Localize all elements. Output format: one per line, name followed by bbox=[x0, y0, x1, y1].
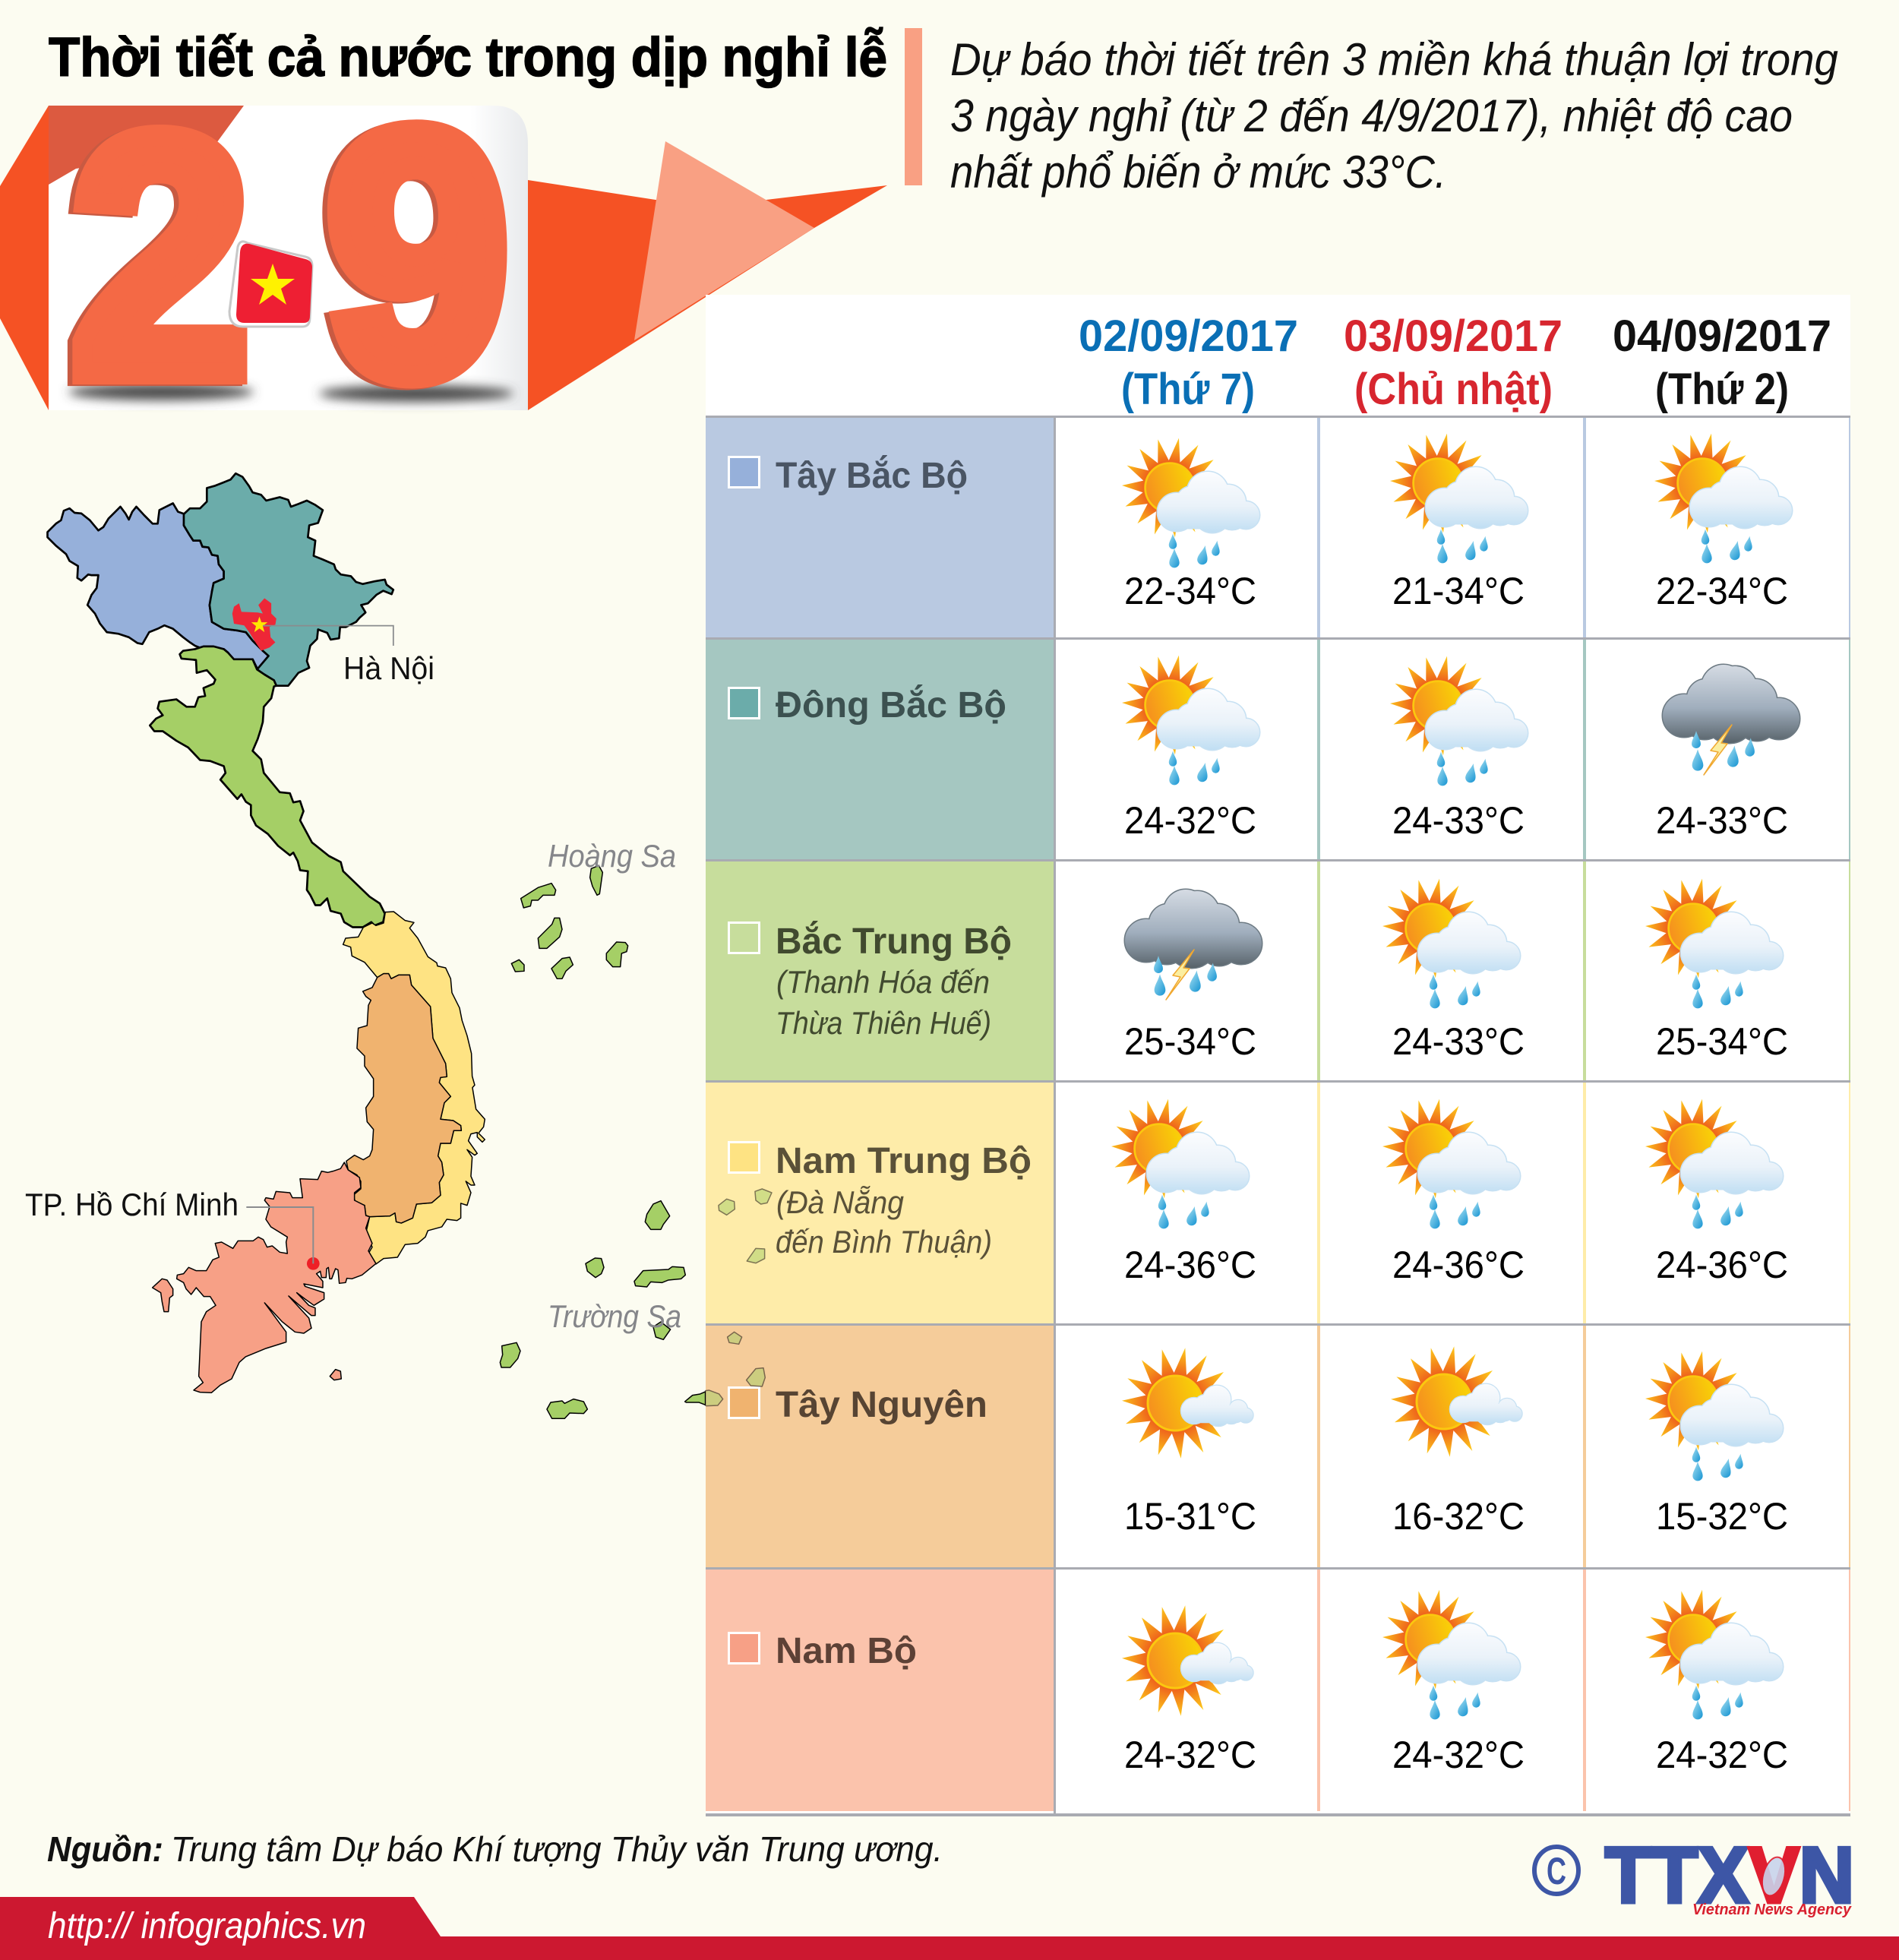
Hà Nội leader line bbox=[263, 626, 393, 646]
region label panel bbox=[706, 1568, 1054, 1811]
temperature: 24-36°C bbox=[1392, 1244, 1525, 1286]
HCMC marker bbox=[307, 1257, 320, 1270]
region label panel bbox=[706, 416, 1054, 638]
south regions bbox=[343, 912, 485, 1264]
weather icon bbox=[1390, 656, 1528, 786]
intro text bbox=[950, 34, 1838, 198]
temperature: 24-36°C bbox=[1656, 1244, 1788, 1286]
date: 03/09/2017: 03/09/2017 bbox=[1344, 311, 1562, 361]
HCMC leader line bbox=[246, 1207, 313, 1263]
legend swatch bbox=[729, 688, 760, 719]
column dividers bbox=[1317, 416, 1850, 638]
row: Đông Bắc Bộ bbox=[706, 638, 1850, 860]
temperature: 24-33°C bbox=[1656, 799, 1788, 842]
copyright mark: C bbox=[1547, 1850, 1566, 1892]
islands: Trường Sa bbox=[500, 1201, 706, 1418]
date: 04/09/2017 bbox=[1613, 311, 1831, 414]
logo: TTXVN bbox=[1534, 1832, 1854, 1920]
temperature: 24-36°C bbox=[1124, 1244, 1256, 1286]
temperature: 22-34°C bbox=[1656, 570, 1788, 612]
weather icon bbox=[1382, 1099, 1520, 1228]
weather icon bbox=[1645, 1099, 1783, 1228]
forecast table bbox=[706, 295, 1850, 1816]
row: Nam Trung Bộ bbox=[706, 1081, 1850, 1324]
temperature: 25-34°C bbox=[1656, 1020, 1788, 1063]
region: Tây Bắc Bộ bbox=[47, 503, 269, 669]
footer band bbox=[0, 1897, 1899, 1960]
weather icon: sun and cloud bbox=[1122, 1605, 1253, 1716]
region name: Nam Bộ bbox=[776, 1631, 917, 1671]
islands: Hoàng Sa bbox=[511, 865, 628, 978]
region: Nam Trung Bộ bbox=[343, 912, 485, 1264]
region: Bắc Trung Bộ bbox=[150, 646, 385, 927]
region: Đông Bắc Bộ bbox=[184, 473, 393, 686]
corner wedge bbox=[49, 106, 244, 185]
region note: (Đà Nẵng bbox=[776, 1184, 904, 1220]
map of Vietnam bbox=[25, 473, 706, 1418]
weather icon: storm bbox=[1663, 665, 1799, 775]
title: Thời tiết cả nước trong dịp nghỉ lễ bbox=[49, 27, 887, 88]
weather icon bbox=[1645, 1351, 1783, 1481]
island: Côn Đảo bbox=[330, 1370, 341, 1380]
weather icon bbox=[1111, 1099, 1249, 1228]
temperature: 16-32°C bbox=[1392, 1495, 1525, 1538]
column dividers bbox=[1317, 638, 1850, 860]
date: 04/09/2017: 04/09/2017 bbox=[1613, 311, 1831, 361]
date: 04/09/2017: (Thứ 2) bbox=[1655, 365, 1789, 414]
Hà Nội star bbox=[251, 617, 267, 632]
weather icon bbox=[1122, 656, 1259, 785]
weather icon bbox=[1390, 434, 1528, 563]
temperature: 24-33°C bbox=[1392, 799, 1525, 842]
region name: Tây Bắc Bộ bbox=[776, 454, 968, 496]
temperature: 24-32°C bbox=[1656, 1734, 1788, 1776]
region name: Tây Nguyên bbox=[776, 1385, 987, 1425]
north regions bbox=[47, 473, 393, 927]
region name: Bắc Trung Bộ bbox=[776, 920, 1012, 962]
intro text: 3 ngày nghỉ (từ 2 đến 4/9/2017), nhiệt độ cao bbox=[950, 90, 1793, 141]
region label panel bbox=[706, 860, 1054, 1081]
accent bar bbox=[905, 28, 922, 185]
region label panel bbox=[706, 638, 1054, 860]
ribbon: orange arrow shapes bbox=[0, 106, 887, 410]
temperature: 15-31°C bbox=[1124, 1495, 1256, 1538]
legend swatch bbox=[729, 1633, 760, 1664]
banner: 2-9 holiday graphic bbox=[0, 60, 887, 448]
legend swatch bbox=[729, 1143, 760, 1173]
temperature: 24-32°C bbox=[1392, 1734, 1525, 1776]
date: 02/09/2017 bbox=[1079, 311, 1298, 414]
region note bbox=[776, 1184, 992, 1260]
label: TP. Hồ Chí Minh: TP. Hồ Chí Minh bbox=[25, 1187, 239, 1222]
table header bbox=[1079, 311, 1831, 414]
date: 02/09/2017: (Thứ 7) bbox=[1121, 365, 1255, 414]
legend swatch bbox=[729, 922, 760, 953]
source note: Nguồn: bbox=[47, 1829, 163, 1869]
weather icon bbox=[1122, 438, 1259, 567]
copyright mark bbox=[1534, 1847, 1578, 1894]
weather icon bbox=[1645, 1590, 1783, 1719]
website url: http:// infographics.vn bbox=[48, 1906, 366, 1946]
region: Tây Nguyên bbox=[346, 974, 461, 1223]
legend swatch bbox=[729, 1387, 760, 1418]
legend swatch bbox=[729, 457, 760, 488]
temperature: 24-32°C bbox=[1124, 799, 1256, 842]
ribbon: salmon triangle bbox=[634, 141, 814, 340]
region note bbox=[776, 964, 991, 1041]
region note: Thừa Thiên Huế) bbox=[776, 1005, 991, 1041]
weather icon bbox=[1382, 1590, 1520, 1719]
column dividers bbox=[1317, 1081, 1850, 1324]
date: 02/09/2017: 02/09/2017 bbox=[1079, 311, 1298, 361]
column dividers bbox=[1317, 1568, 1850, 1811]
region note: (Thanh Hóa đến bbox=[776, 964, 990, 1000]
temperature: 25-34°C bbox=[1124, 1020, 1256, 1063]
weather icon: sun and cloud bbox=[1122, 1348, 1253, 1459]
island: Phú Quốc bbox=[153, 1279, 173, 1312]
region: Nam Bộ bbox=[177, 1162, 376, 1393]
weather icon bbox=[1382, 879, 1520, 1008]
column dividers bbox=[1317, 860, 1850, 1081]
tagline: Vietnam News Agency bbox=[1692, 1902, 1852, 1918]
weather icon bbox=[1654, 434, 1792, 563]
weather icon: storm bbox=[1125, 890, 1262, 1000]
column dividers bbox=[1317, 1324, 1850, 1568]
intro text: Dự báo thời tiết trên 3 miền khá thuận lợi trong bbox=[950, 34, 1838, 85]
label: Hà Nội: Hà Nội bbox=[343, 650, 434, 686]
digit 2: 2 bbox=[71, 65, 250, 447]
image panel bbox=[49, 106, 528, 410]
flag bbox=[229, 242, 312, 327]
temperature: 21-34°C bbox=[1392, 570, 1525, 612]
date: 03/09/2017 bbox=[1344, 311, 1562, 414]
region name: Đông Bắc Bộ bbox=[776, 684, 1006, 726]
Hà Nội area bbox=[232, 598, 276, 651]
row: Bắc Trung Bộ bbox=[706, 860, 1850, 1081]
label: Hoàng Sa: Hoàng Sa bbox=[548, 838, 676, 874]
intro text: nhất phổ biến ở mức 33°C. bbox=[950, 147, 1446, 198]
row: Tây Nguyên bbox=[706, 1324, 1850, 1568]
temperature: 15-32°C bbox=[1656, 1495, 1788, 1538]
label: Trường Sa: Trường Sa bbox=[548, 1298, 681, 1334]
region name: Nam Trung Bộ bbox=[776, 1141, 1032, 1181]
temperature: 24-33°C bbox=[1392, 1020, 1525, 1063]
digit 9: 9 bbox=[327, 60, 508, 448]
digit shadows bbox=[68, 384, 513, 402]
islands overlapping table bbox=[706, 1189, 772, 1406]
table background bbox=[706, 295, 1850, 1815]
temperature: 24-32°C bbox=[1124, 1734, 1256, 1776]
region note: đến Bình Thuận) bbox=[776, 1224, 992, 1260]
source note: Trung tâm Dự báo Khí tượng Thủy văn Trung ương. bbox=[171, 1829, 943, 1869]
agency name: TTXVN bbox=[1605, 1832, 1854, 1920]
globe bbox=[1758, 1854, 1789, 1898]
region label panel bbox=[706, 1324, 1054, 1568]
date: 03/09/2017: (Chủ nhật) bbox=[1354, 365, 1553, 414]
weather icon bbox=[1645, 879, 1783, 1008]
region label panel bbox=[706, 1081, 1054, 1324]
temperature: 22-34°C bbox=[1124, 570, 1256, 612]
weather icon: sun and cloud bbox=[1391, 1346, 1522, 1457]
row: Tây Bắc Bộ bbox=[706, 416, 1850, 638]
row: Nam Bộ bbox=[706, 1568, 1850, 1811]
